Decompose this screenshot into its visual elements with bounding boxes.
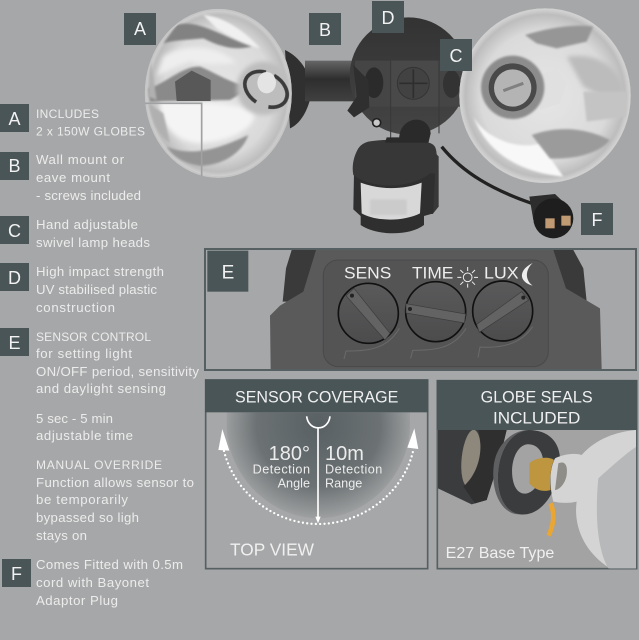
feature F — [2, 557, 183, 608]
product photo: twin flood light — [145, 8, 631, 238]
feature B: Wall mount or — [36, 152, 125, 167]
feature E: Function allows sensor to — [36, 475, 194, 490]
heading — [205, 379, 428, 412]
bayonet plug — [529, 194, 573, 238]
feature A: 2 x 150W GLOBES — [36, 124, 145, 138]
detection range: Range — [325, 477, 362, 491]
label D: D — [382, 8, 394, 28]
detection angle: 180° — [269, 443, 310, 465]
label F: F — [592, 210, 602, 230]
housing shoulders — [283, 250, 587, 302]
panel: sensor controls — [205, 249, 636, 370]
lamp socket — [438, 430, 507, 504]
panel: globe seals — [437, 380, 637, 569]
bright highlights — [160, 100, 254, 143]
right globe — [459, 8, 631, 183]
feature E: be temporarily — [36, 492, 128, 507]
heading — [437, 380, 637, 430]
detection range: Detection — [325, 463, 382, 477]
feature C: Hand adjustable — [36, 217, 138, 232]
lamp reflection — [237, 62, 290, 115]
detection range: 10m — [325, 443, 364, 465]
feature A: A — [8, 109, 21, 129]
feature F: cord with Bayonet — [36, 575, 149, 590]
detection angle: Detection — [253, 463, 310, 477]
PIR sensor head — [353, 137, 439, 233]
dial labels: SENS — [344, 263, 391, 282]
dial labels: TIME — [412, 263, 453, 282]
globe photo — [438, 429, 637, 568]
feature E: for setting light — [36, 346, 132, 361]
feature E: ON/OFF period, sensitivity — [36, 364, 199, 379]
feature C: C — [8, 221, 21, 241]
label A — [124, 13, 156, 45]
feature C: swivel lamp heads — [36, 235, 150, 250]
feature F: F — [11, 564, 22, 584]
feature F: Comes Fitted with 0.5m — [36, 557, 183, 572]
dial: time — [406, 282, 466, 358]
feature F: Adaptor Plug — [36, 593, 118, 608]
detection range — [325, 443, 382, 491]
dial: sens — [338, 283, 399, 359]
label D — [372, 1, 404, 33]
dial: lux — [473, 281, 533, 358]
dotted arc with arrows — [218, 428, 418, 524]
mounting housing — [347, 17, 467, 143]
feature C — [0, 216, 150, 250]
heading: SENSOR COVERAGE — [235, 387, 398, 406]
brass thread — [529, 458, 554, 491]
label A: A — [134, 19, 146, 39]
globe — [550, 430, 637, 568]
feature list — [0, 104, 199, 608]
feature E: stays on — [36, 528, 87, 543]
detection angle — [253, 443, 310, 491]
feature D: D — [8, 268, 21, 288]
feature E: SENSOR CONTROL — [36, 330, 151, 344]
feature D: construction — [36, 300, 115, 315]
yellow seal tab — [549, 503, 553, 536]
feature E: adjustable time — [36, 428, 133, 443]
label E: E — [222, 262, 234, 283]
feature B: eave mount — [36, 170, 110, 185]
label F — [581, 203, 613, 235]
top view caption: TOP VIEW — [230, 539, 314, 559]
feature E: and daylight sensing — [36, 381, 166, 396]
dial labels: LUX — [484, 263, 519, 282]
label B — [309, 13, 341, 45]
heading: INCLUDED — [493, 408, 580, 427]
detection angle: Angle — [278, 477, 310, 491]
feature E: 5 sec - 5 min — [36, 411, 113, 426]
base type caption: E27 Base Type — [446, 545, 554, 562]
icon: sun — [457, 267, 478, 288]
rubber seal ring — [493, 430, 560, 515]
feature B: - screws included — [36, 188, 141, 203]
heading: GLOBE SEALS — [481, 387, 593, 406]
label E — [207, 251, 248, 292]
left globe — [145, 9, 294, 178]
feature E: E — [8, 333, 21, 353]
control housing — [270, 250, 602, 369]
dark bands — [163, 24, 252, 48]
label C — [440, 39, 472, 71]
feature B — [0, 152, 141, 203]
feature B: B — [8, 156, 21, 176]
panel: sensor coverage — [205, 379, 428, 569]
feature E: bypassed so ligh — [36, 510, 139, 525]
feature E: MANUAL OVERRIDE — [36, 458, 162, 472]
feature E — [0, 328, 199, 543]
feature D: UV stabilised plastic — [36, 282, 157, 297]
dial labels — [344, 263, 519, 282]
range arrow — [307, 416, 330, 523]
label C: C — [450, 46, 462, 66]
power cord — [442, 147, 532, 203]
coverage fan — [227, 412, 410, 518]
feature A: INCLUDES — [36, 107, 99, 121]
feature A — [0, 104, 145, 138]
icon: moon — [522, 263, 533, 286]
label B: B — [319, 20, 331, 40]
feature D: High impact strength — [36, 264, 164, 279]
left lamp neck — [285, 50, 360, 128]
feature D — [0, 263, 164, 315]
